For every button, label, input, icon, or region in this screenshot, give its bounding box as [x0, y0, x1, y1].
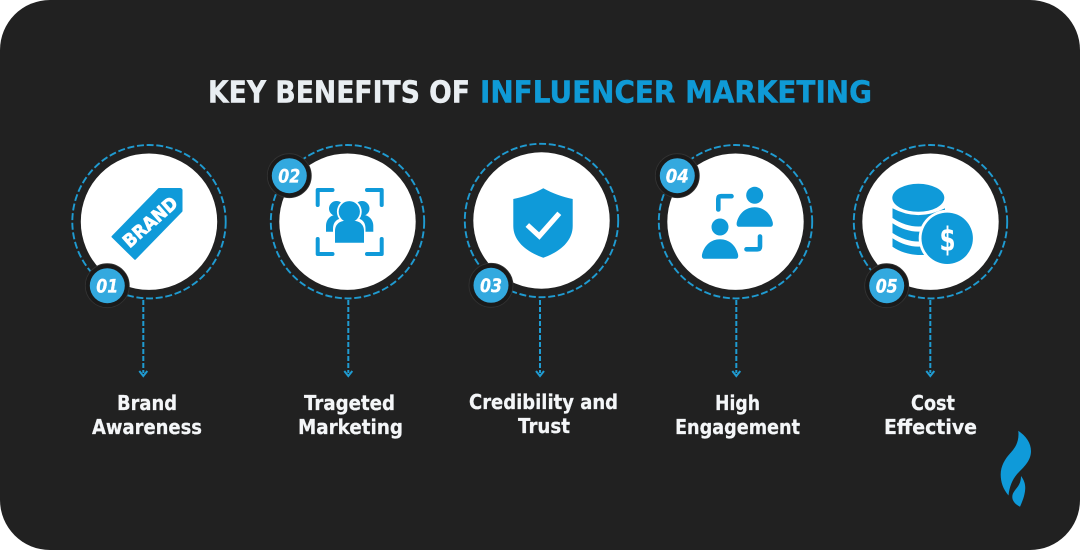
label 1 — [92, 391, 202, 439]
label 5: Effective — [884, 415, 977, 439]
label 4 — [675, 391, 800, 439]
label 3: Trust — [518, 414, 570, 438]
badge 03: 03 — [480, 275, 502, 297]
title: KEY BENEFITS OF — [208, 76, 470, 110]
badge 01: 01 — [96, 276, 118, 298]
badge 04 — [655, 154, 699, 198]
step 4: high engagement — [655, 145, 812, 439]
badge 01 — [85, 264, 129, 308]
dashed ring 3 — [465, 144, 618, 297]
label 4: Engagement — [675, 415, 800, 439]
title — [208, 76, 872, 110]
label 2: Trageted — [304, 391, 395, 415]
step 5: cost effective — [854, 145, 1007, 439]
label 1: Awareness — [92, 415, 202, 439]
white disc 1 — [81, 154, 217, 290]
dashed ring 4 — [659, 145, 812, 298]
label 4: High — [715, 391, 760, 415]
white disc 5 — [862, 154, 999, 290]
dashed ring 2 — [271, 145, 424, 298]
step 1: brand awareness — [72, 145, 226, 439]
step 3: credibility and trust — [465, 144, 618, 438]
badge 03 — [469, 263, 513, 307]
badge 04: 04 — [666, 166, 689, 188]
white disc 4 — [667, 154, 804, 290]
icon: brand tag: BRAND — [119, 193, 182, 252]
badge 02: 02 — [278, 166, 300, 188]
title: INFLUENCER MARKETING — [480, 76, 872, 110]
icon: shield with check — [513, 188, 573, 258]
arrow 3 — [536, 300, 544, 376]
badge 02 — [267, 154, 311, 198]
dashed ring 1 — [72, 145, 226, 298]
label 3 — [469, 390, 618, 438]
label 2 — [298, 391, 403, 439]
badge 05: 05 — [876, 276, 898, 298]
icon: two people exchanging — [702, 187, 773, 259]
label 1: Brand — [117, 391, 177, 415]
label 5 — [884, 391, 977, 439]
step 2: targeted marketing — [267, 145, 424, 439]
arrow 4 — [732, 300, 740, 376]
label 2: Marketing — [298, 415, 403, 439]
icon: coin stack with dollar — [892, 184, 976, 267]
white disc 2 — [279, 154, 416, 290]
label 5: Cost — [911, 391, 955, 415]
badge 05 — [865, 264, 909, 308]
icon: audience in focus frame — [318, 190, 382, 254]
dashed ring 5 — [854, 145, 1007, 298]
white disc 3 — [473, 152, 610, 289]
icon: flame logo — [1001, 431, 1031, 507]
arrow 1 — [139, 300, 147, 376]
arrow 5 — [926, 300, 934, 376]
arrow 2 — [344, 300, 352, 376]
icon: coin stack with dollar: $ — [940, 220, 956, 258]
label 3: Credibility and — [469, 390, 618, 414]
